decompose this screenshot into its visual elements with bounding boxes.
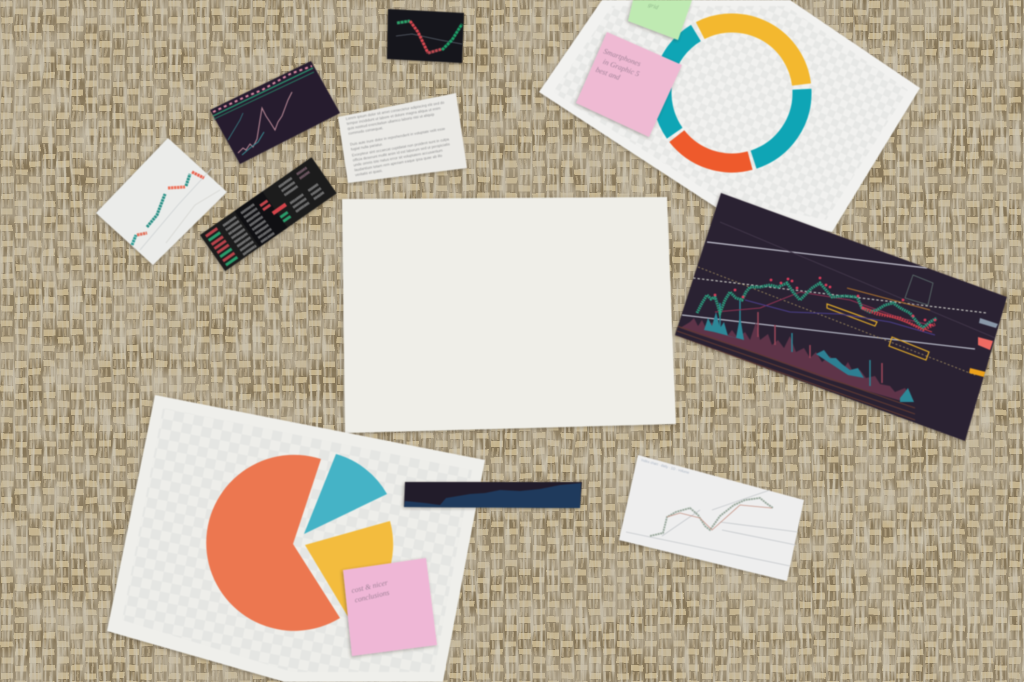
- quote numbers: 888888: [313, 191, 325, 201]
- price axis tags: [969, 318, 998, 377]
- trend lines: [682, 222, 1000, 375]
- card header text: Index chart · daily · 1D · volume: [641, 458, 690, 475]
- quote numbers: 88888888: [242, 244, 257, 257]
- quote numbers: 888888: [310, 187, 322, 197]
- quote numbers: 88888888: [254, 223, 270, 236]
- candlestick line: [397, 21, 462, 53]
- panel: white text card: laudantium totam rem aperiam eaque ipsa quae ab illo: [354, 154, 442, 172]
- moving averages: [715, 288, 935, 335]
- panel: white candlestick card: [96, 138, 227, 265]
- price candles: [697, 283, 937, 330]
- quote numbers: 88888888: [246, 211, 261, 223]
- panel: white text card: Duis aute irure dolor in reprehenderit in voluptate velit esse: [350, 127, 445, 147]
- pink sticky note with handwriting: in Graphic 5: [602, 57, 641, 78]
- quote numbers: 88888888: [292, 197, 307, 209]
- pink sticky note with handwriting: best and: [595, 65, 622, 82]
- quote numbers: 88888888: [289, 193, 305, 205]
- volume histogram: [680, 300, 914, 402]
- quote numbers: 888888: [307, 183, 319, 193]
- quote numbers: 888888: [296, 166, 308, 176]
- quote numbers: 888888: [299, 170, 311, 180]
- quote numbers: 88888888: [260, 232, 275, 244]
- pink sticky note with handwriting: conclusions: [354, 588, 390, 604]
- quote numbers: 88888888: [228, 224, 243, 236]
- green sticky note: grid: [647, 2, 660, 12]
- quote numbers: 88888888: [225, 219, 240, 232]
- pie slice: teal: [304, 454, 387, 534]
- pink sticky note with handwriting: Smartphones: [602, 46, 642, 68]
- quote numbers: [222, 166, 328, 257]
- orange and yellow range boxes: [827, 275, 933, 360]
- pink sticky note with handwriting: [576, 32, 682, 137]
- pie slice: yellow: [305, 521, 393, 620]
- quote numbers: 88888888: [239, 240, 255, 252]
- panel: white text card: Excepteur sint occaecat cupidatat non proident sunt in culpa: [352, 137, 450, 157]
- pink sticky note with handwriting: [343, 558, 437, 656]
- panel: small dark candlestick card: [387, 9, 464, 63]
- panel: dark blue strip chart: [404, 482, 582, 508]
- panel: white text card: quis nostrud exercitation ullamco laboris nisi ut aliquip: [347, 112, 435, 131]
- panel: blank white sheet: [342, 197, 676, 433]
- quote numbers: 88888888: [243, 207, 258, 219]
- panel: white line chart card: [619, 455, 804, 581]
- quote numbers: 88888888: [236, 236, 252, 248]
- quote numbers: 88888888: [278, 176, 293, 189]
- panel: white text card: veritatis et quasi.: [355, 169, 383, 177]
- panel: white text card: unde omnis iste natus error sit voluptatem accusantium: [353, 149, 443, 167]
- quote numbers: 88888888: [222, 215, 237, 228]
- panel: donut chart sheet: [539, 0, 920, 232]
- pink sticky note with handwriting: cost & nicer: [350, 578, 389, 595]
- panel: white text card: commodo consequat.: [348, 126, 383, 136]
- quote numbers: 88888888: [240, 203, 255, 215]
- pie slice: orange: [206, 455, 340, 631]
- panel: white text card: tempor incididunt ut labore et dolore magna aliqua ut enim: [346, 106, 441, 126]
- price line: [650, 498, 773, 536]
- quote numbers: 88888888: [295, 201, 310, 214]
- coloured quote column: [205, 187, 296, 266]
- donut chart: [662, 23, 802, 163]
- panel: white text card: fugiat nulla pariatur.: [351, 142, 383, 152]
- panel: white text card: officia deserunt mollit anim id est laborum sed ut perspiciatis: [352, 142, 450, 162]
- green sticky note: [628, 0, 692, 40]
- lower panel stripes: [677, 326, 915, 426]
- quote numbers: 88888888: [281, 181, 296, 193]
- panel: dark quotes table card: [200, 157, 337, 271]
- quote numbers: 88888888: [283, 185, 299, 197]
- panel: large dark trading chart: [675, 193, 1007, 441]
- quote numbers: 88888888: [231, 228, 246, 240]
- quote numbers: 88888888: [251, 219, 267, 232]
- panel: white text card: [338, 93, 467, 183]
- price line: [238, 92, 292, 153]
- panel: dark line chart card: [210, 61, 340, 164]
- red signal dots: [714, 277, 936, 326]
- quote numbers: 88888888: [257, 227, 273, 240]
- quote numbers: 88888888: [233, 232, 249, 244]
- panel: pie chart sheet: [107, 395, 485, 682]
- panel: white text card: Lorem ipsum dolor sit amet consectetur adipiscing elit sed do: [346, 101, 445, 121]
- quote numbers: 88888888: [249, 215, 264, 228]
- candlesticks: [132, 172, 204, 245]
